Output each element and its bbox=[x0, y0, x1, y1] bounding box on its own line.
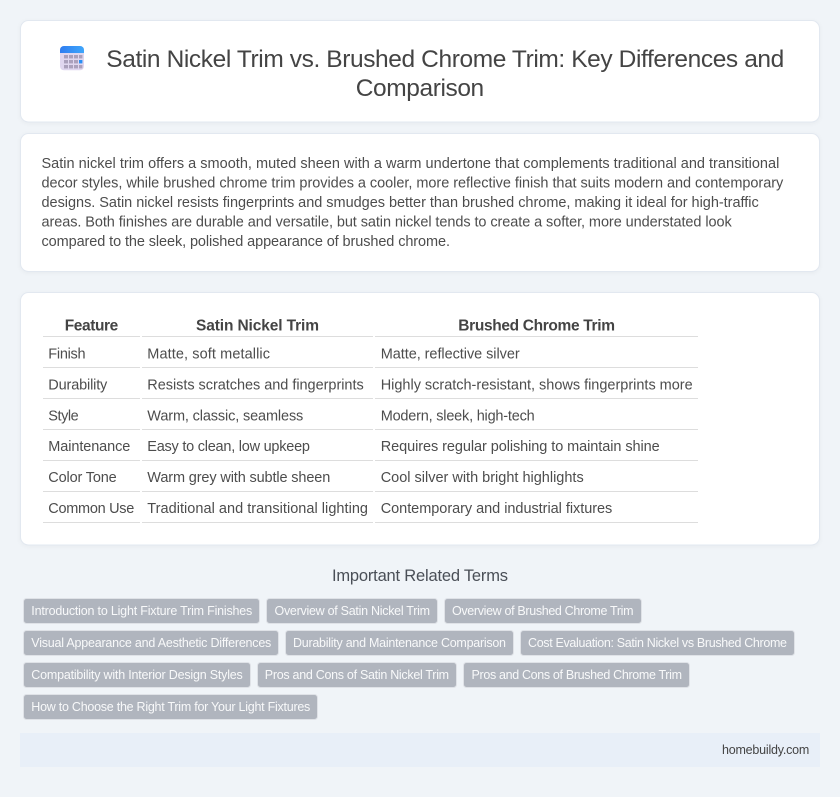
table row: style: Style bbox=[48, 408, 79, 424]
table row: style: Modern, sleek, high-tech bbox=[381, 408, 535, 424]
tag bbox=[520, 630, 794, 656]
tag bbox=[464, 662, 690, 688]
tag: Cost Evaluation: Satin Nickel vs Brushed Chrome bbox=[528, 636, 787, 650]
text block: description: compared to the sleek, polished appearance of brushed chrome. bbox=[42, 234, 450, 250]
text block: description: Satin nickel trim offers a smooth, muted sheen with a warm undertone that complements traditional and transitional bbox=[42, 156, 779, 172]
tag bbox=[266, 598, 438, 624]
footer source text: homebuildy.com bbox=[722, 743, 809, 757]
tag: Overview of Brushed Chrome Trim bbox=[452, 604, 634, 618]
title bbox=[106, 46, 784, 102]
tag: How to Choose the Right Trim for Your Light Fixtures bbox=[31, 700, 310, 714]
table row: color tone: Color Tone bbox=[48, 470, 117, 486]
table row: color tone: Cool silver with bright highlights bbox=[381, 470, 584, 486]
tag bbox=[24, 662, 250, 688]
text block: description: decor styles, while brushed chrome trim provides a cooler, more reflective finish that suits modern and contemporary bbox=[42, 175, 784, 191]
table row: finish: Matte, soft metallic bbox=[147, 346, 270, 362]
tag bbox=[444, 598, 642, 624]
title: Satin Nickel Trim vs. Brushed Chrome Trim: Key Differences and bbox=[106, 46, 784, 73]
panel: related term tags bbox=[24, 598, 794, 720]
panel: introduction text bbox=[20, 134, 820, 272]
title: Comparison bbox=[356, 75, 484, 102]
table header row: Brushed Chrome Trim bbox=[458, 318, 615, 335]
panel: header bbox=[20, 20, 820, 122]
footer bbox=[20, 733, 820, 767]
tag: Pros and Cons of Satin Nickel Trim bbox=[265, 668, 449, 682]
table row: maintenance: Maintenance bbox=[48, 439, 130, 455]
table row: style bbox=[43, 408, 698, 430]
tag: Pros and Cons of Brushed Chrome Trim bbox=[472, 668, 682, 682]
icon: calendar bbox=[60, 46, 84, 70]
tag bbox=[258, 662, 456, 688]
table row: common use: Contemporary and industrial fixtures bbox=[381, 501, 612, 517]
table row: maintenance bbox=[43, 439, 698, 460]
heading: important related terms: Important Related Terms bbox=[332, 567, 508, 585]
text block: description: areas. Both finishes are durable and versatile, but satin nickel tends to create a softer, more understated look bbox=[42, 214, 732, 230]
table row: maintenance: Requires regular polishing to maintain shine bbox=[381, 439, 660, 455]
table row: durability: Durability bbox=[48, 377, 108, 393]
tag: Durability and Maintenance Comparison bbox=[293, 636, 506, 650]
text block: description bbox=[42, 156, 784, 250]
table row: finish: Matte, reflective silver bbox=[381, 346, 520, 362]
table header row: Satin Nickel Trim bbox=[196, 318, 319, 335]
table row: durability: Highly scratch-resistant, shows fingerprints more bbox=[381, 377, 693, 393]
table row: durability bbox=[43, 377, 698, 398]
tag bbox=[24, 630, 278, 656]
text block: description: designs. Satin nickel resists fingerprints and smudges better than brushed chrome, making it ideal for high-traffic bbox=[42, 195, 759, 211]
panel: comparison table bbox=[20, 292, 820, 545]
table row: finish bbox=[43, 346, 698, 368]
table header row bbox=[43, 318, 698, 336]
table row: maintenance: Easy to clean, low upkeep bbox=[147, 439, 310, 455]
tag bbox=[24, 694, 318, 720]
tag: Introduction to Light Fixture Trim Finishes bbox=[31, 604, 252, 618]
table header row: Feature bbox=[65, 318, 119, 335]
table row: finish: Finish bbox=[48, 346, 86, 362]
table row: color tone bbox=[43, 470, 698, 492]
table row: style: Warm, classic, seamless bbox=[147, 408, 303, 424]
table row: common use: Traditional and transitional lighting bbox=[147, 501, 368, 517]
tag bbox=[286, 630, 514, 656]
tag: Overview of Satin Nickel Trim bbox=[274, 604, 430, 618]
table row: common use: Common Use bbox=[48, 501, 134, 517]
table row: durability: Resists scratches and fingerprints bbox=[147, 377, 364, 393]
tag bbox=[24, 598, 260, 624]
table row: common use bbox=[43, 501, 698, 522]
table row: color tone: Warm grey with subtle sheen bbox=[147, 470, 330, 486]
tag: Compatibility with Interior Design Styles bbox=[31, 668, 243, 682]
tag: Visual Appearance and Aesthetic Differences bbox=[31, 636, 271, 650]
